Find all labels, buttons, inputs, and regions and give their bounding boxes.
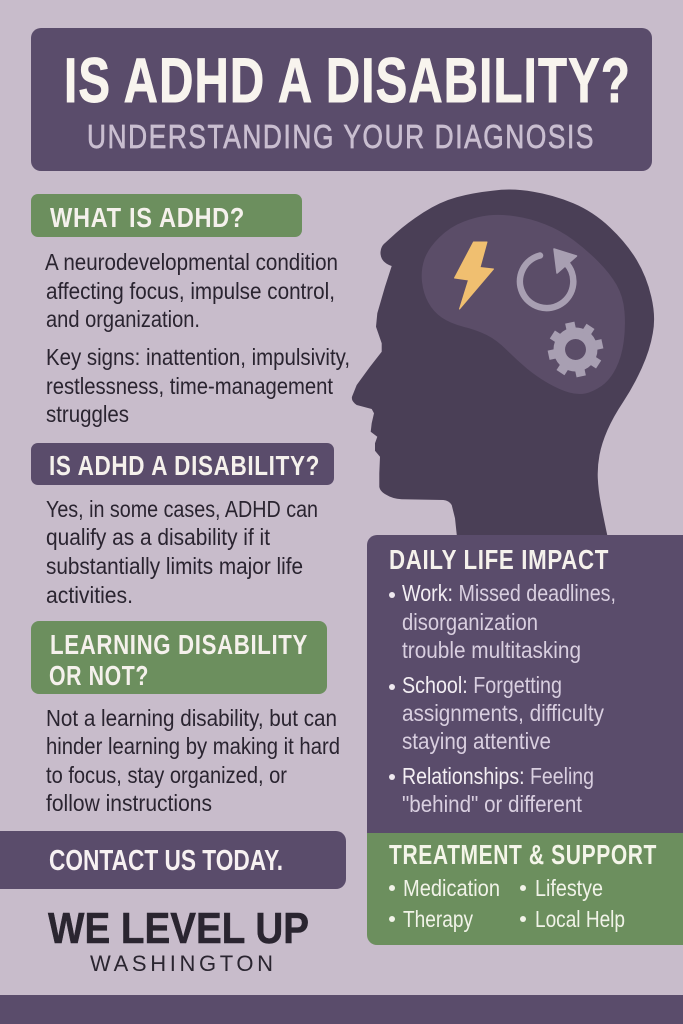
panel: treatment and support	[367, 833, 683, 945]
text block: key signs: Key signs: inattention, impulsivity,	[46, 344, 350, 370]
list item: work	[389, 580, 616, 663]
heading: what is ADHD: WHAT IS ADHD?	[50, 202, 245, 233]
text block: disability answer: qualify as a disability if it	[46, 524, 271, 550]
text block: key signs: restlessness, time-management	[46, 373, 334, 399]
text block: definition: A neurodevelopmental condition	[45, 249, 338, 275]
list: treatment options: Therapy	[403, 906, 473, 932]
heading: learning disability or not	[31, 621, 327, 694]
heading: is ADHD a disability: IS ADHD A DISABILITY?	[49, 450, 320, 481]
list item: work: Work: Missed deadlines,	[402, 580, 616, 606]
heading: daily life impact: DAILY LIFE IMPACT	[389, 544, 609, 575]
list: treatment options: Local Help	[535, 906, 625, 932]
text block: disability answer: activities.	[46, 582, 133, 608]
list item: work: trouble multitasking	[402, 637, 581, 663]
text block: key signs: struggles	[46, 401, 129, 427]
contact banner	[0, 831, 346, 889]
logo: WASHINGTON	[90, 951, 273, 976]
list: treatment options	[389, 875, 625, 932]
text block: learning answer	[46, 705, 340, 816]
contact banner: CONTACT US TODAY.	[49, 845, 283, 877]
panel: daily life impact	[367, 535, 683, 833]
text block: learning answer: follow instructions	[46, 790, 212, 816]
list item: work: disorganization	[402, 609, 538, 635]
heading: is ADHD a disability	[31, 443, 334, 485]
heading: learning disability or not: LEARNING DISABILITY	[50, 629, 308, 660]
list item: relationships: Relationships: Feeling	[402, 763, 594, 789]
heading: what is ADHD	[31, 194, 302, 237]
text block: definition: affecting focus, impulse control,	[46, 278, 335, 304]
list item: school: assignments, difficulty	[402, 700, 604, 726]
section: what is ADHD	[31, 194, 350, 427]
text block: learning answer: Not a learning disability, but can	[46, 705, 337, 731]
list item: relationships	[389, 763, 594, 817]
title banner	[31, 28, 652, 171]
brain region	[422, 215, 625, 394]
text block: definition	[45, 249, 338, 332]
text block: disability answer: Yes, in some cases, ADHD can	[46, 496, 318, 522]
head silhouette with icons	[352, 190, 654, 540]
text block: definition: and organization.	[46, 306, 200, 332]
footer bar	[0, 995, 683, 1024]
section: is ADHD a disability	[31, 443, 334, 608]
list item: school: staying attentive	[402, 728, 551, 754]
text block: learning answer: hinder learning by making it hard	[46, 733, 340, 759]
text block: key signs	[46, 344, 350, 427]
heading: learning disability or not: OR NOT?	[49, 660, 149, 691]
list item: relationships: "behind" or different	[402, 791, 583, 817]
section: learning disability	[31, 621, 340, 816]
list item: school	[389, 672, 604, 754]
list: treatment options: Medication	[403, 875, 500, 901]
list item: school: School: Forgetting	[402, 672, 562, 698]
logo	[48, 904, 309, 976]
icon: gear	[543, 317, 608, 382]
logo: WE LEVEL UP	[48, 904, 309, 953]
text block: disability answer: substantially limits major life	[46, 553, 303, 579]
text block: learning answer: to focus, stay organized, or	[46, 762, 287, 788]
icon: cycle arrow	[520, 249, 576, 308]
list: treatment options: Lifestye	[535, 875, 603, 901]
text block: disability answer	[46, 496, 318, 608]
icon: lightning bolt	[454, 242, 494, 309]
